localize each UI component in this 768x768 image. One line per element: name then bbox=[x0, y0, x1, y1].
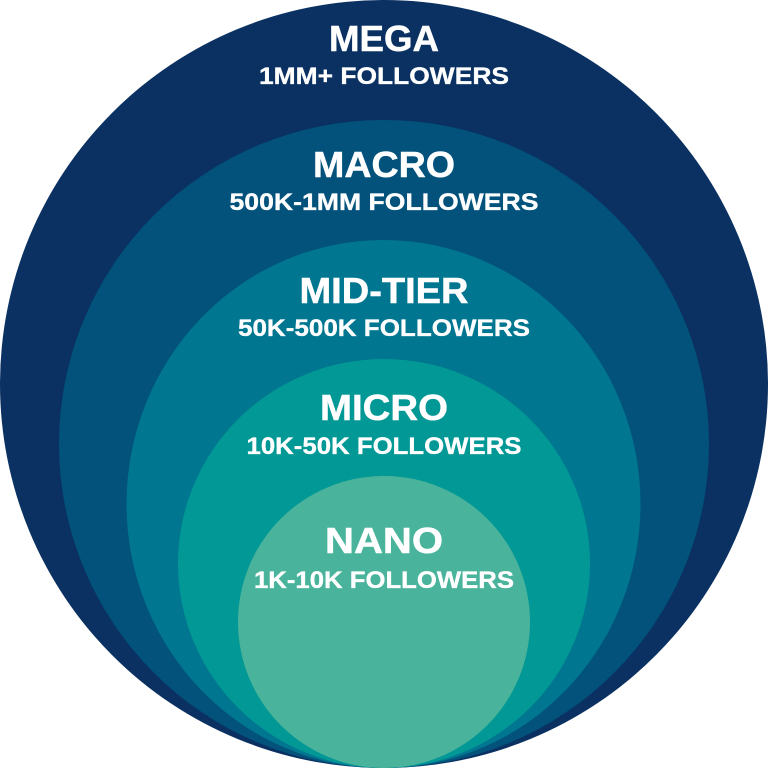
label: macro: MACRO bbox=[313, 144, 455, 185]
label: mid-tier: MID-TIER bbox=[300, 270, 468, 311]
circle: micro bbox=[178, 359, 590, 768]
label: macro bbox=[230, 144, 538, 216]
label: mega: 1MM+ FOLLOWERS bbox=[259, 63, 509, 90]
label: macro: 500K-1MM FOLLOWERS bbox=[230, 189, 538, 216]
circle: nano bbox=[238, 476, 530, 768]
label: micro: MICRO bbox=[320, 387, 448, 428]
label: mid-tier bbox=[238, 270, 530, 342]
label: micro: 10K-50K FOLLOWERS bbox=[246, 433, 522, 460]
label: mega: MEGA bbox=[329, 18, 439, 59]
label: mid-tier: 50K-500K FOLLOWERS bbox=[238, 315, 530, 342]
circle: macro bbox=[59, 120, 709, 768]
label: micro bbox=[246, 387, 522, 460]
circle: mid-tier bbox=[126, 240, 640, 768]
label: nano: NANO bbox=[325, 520, 443, 561]
label: mega bbox=[259, 18, 509, 90]
label: nano: 1K-10K FOLLOWERS bbox=[254, 567, 514, 594]
label: nano bbox=[254, 520, 514, 594]
